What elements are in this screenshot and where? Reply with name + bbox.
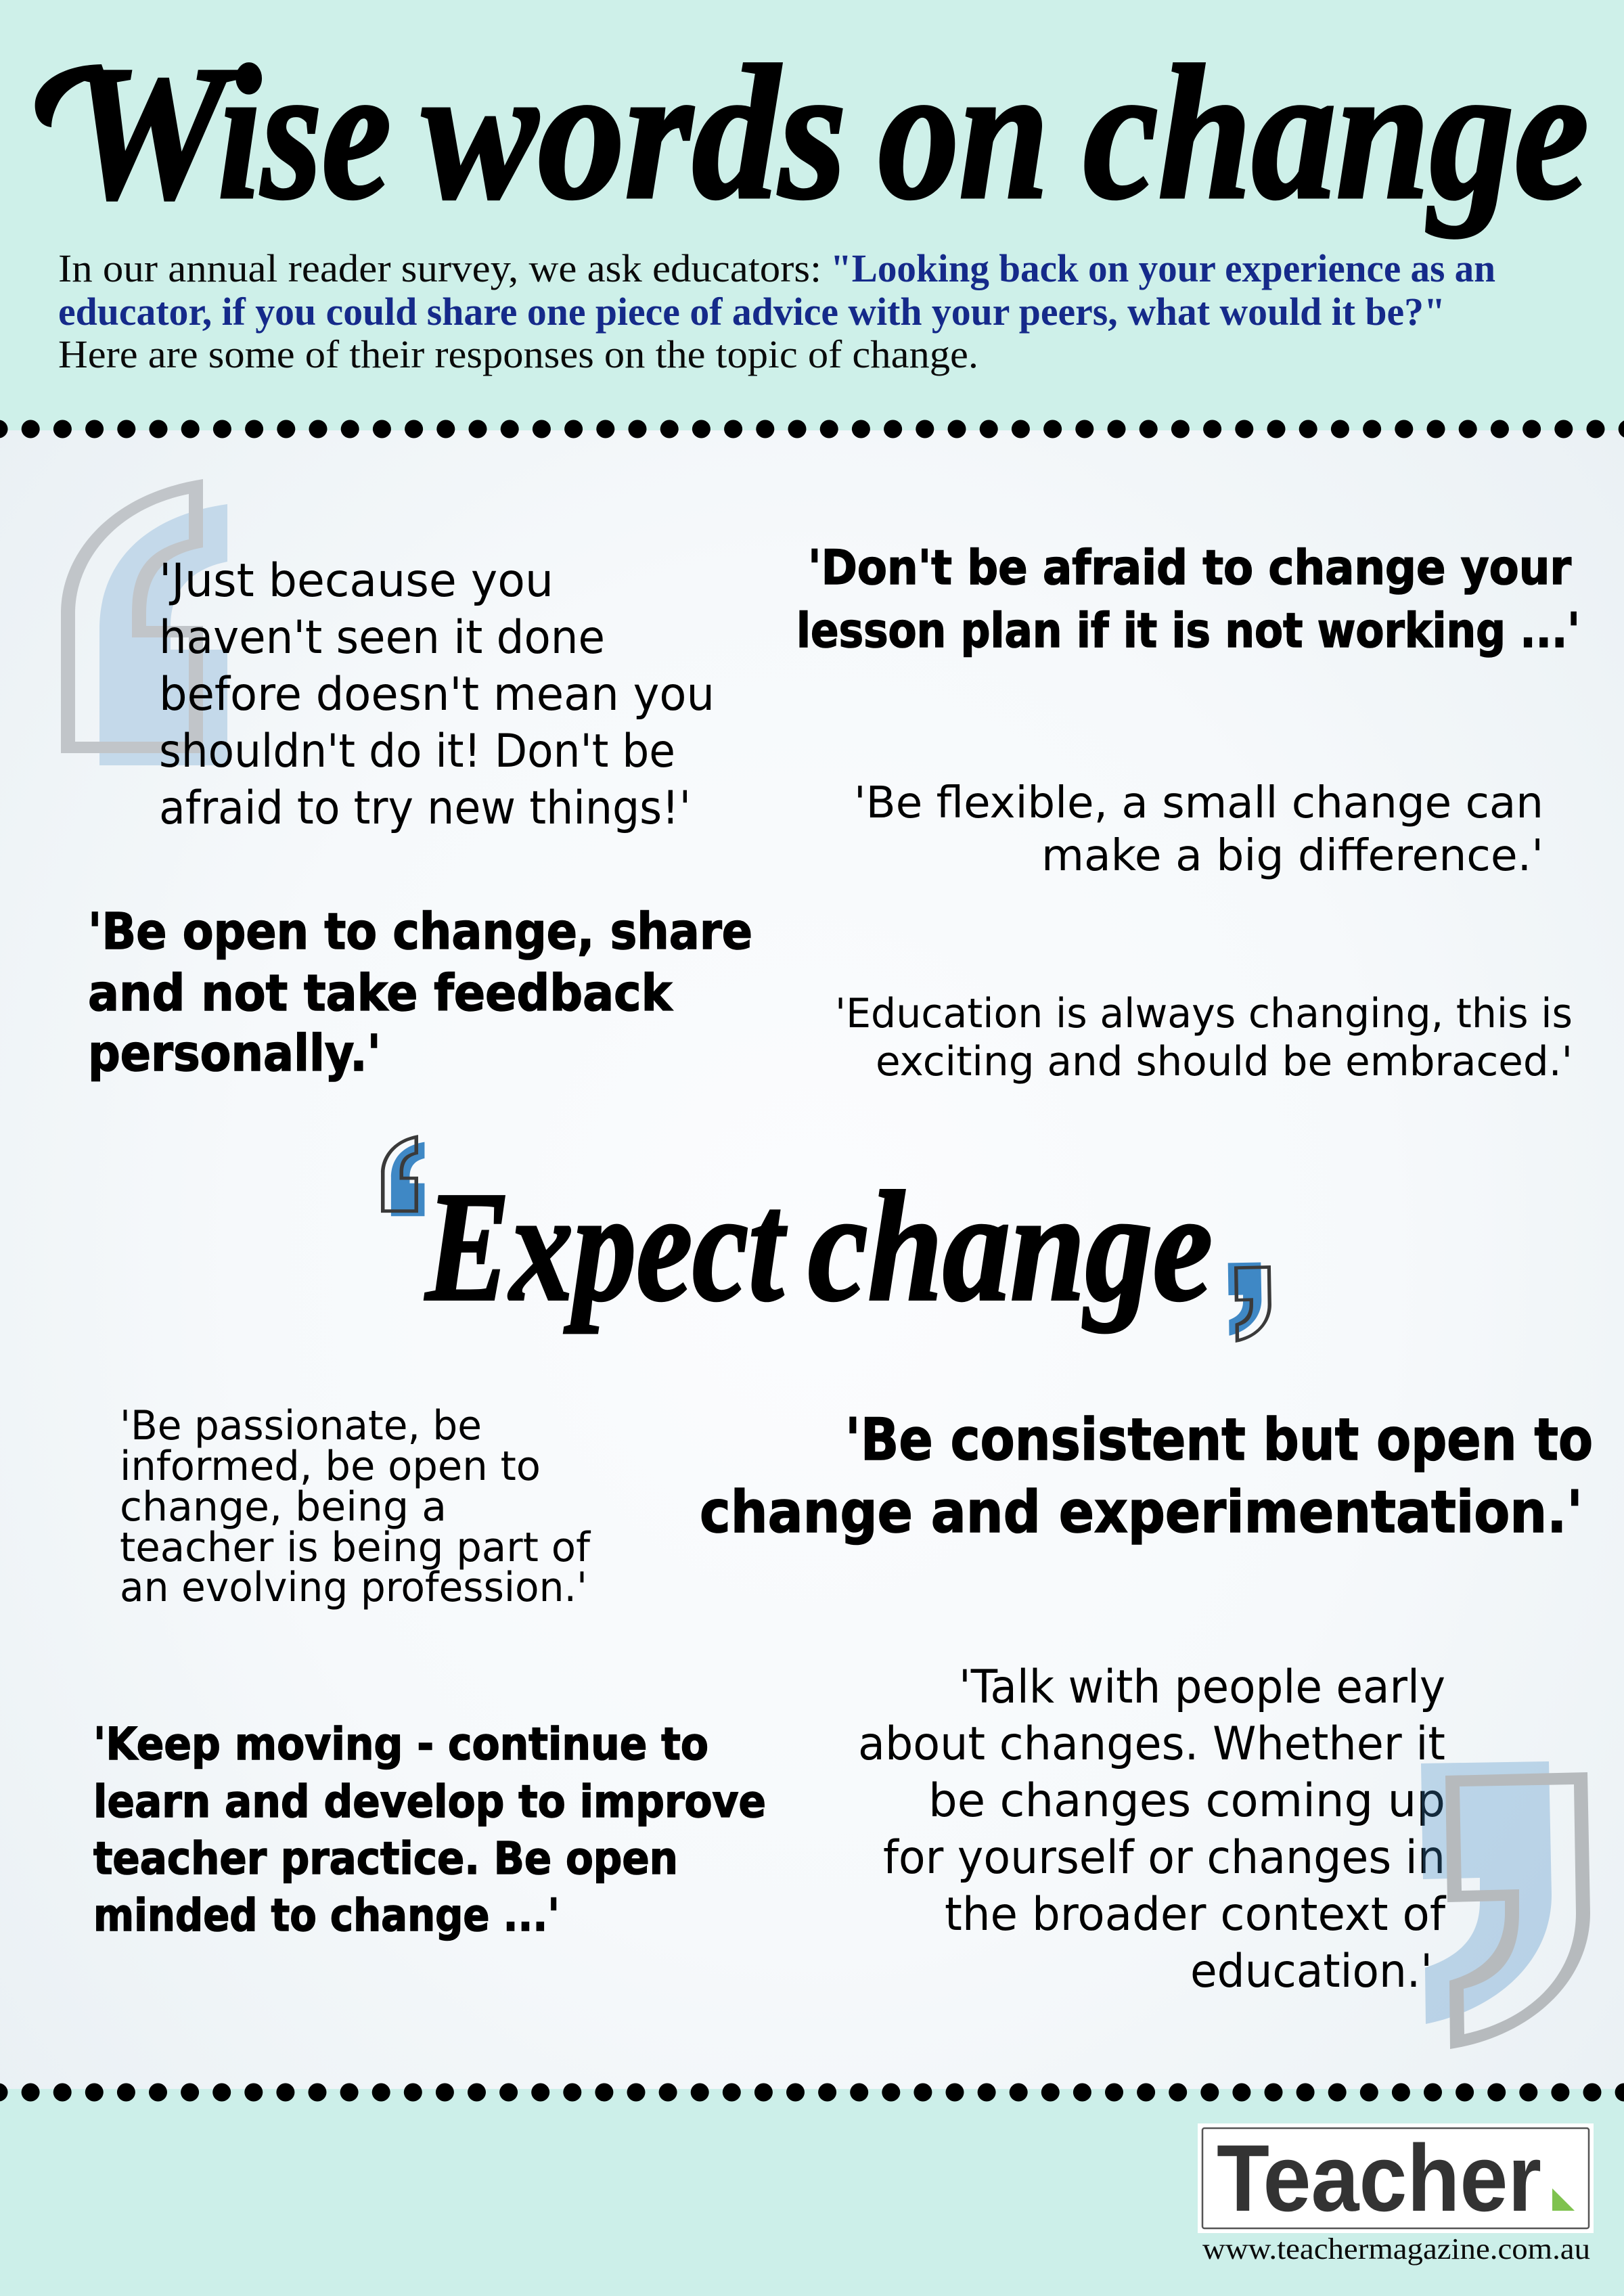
icon: large opening quote mark — [61, 479, 227, 765]
quote: be passionate: 'Be passionate, be — [120, 1402, 482, 1449]
quote: just because you haven't seen it done: 'Just because you — [159, 554, 554, 608]
title — [35, 27, 1589, 239]
bottom teal band — [0, 2089, 1624, 2296]
quote: be passionate: teacher is being part of — [120, 1524, 591, 1571]
heading: expect change: change — [808, 1160, 1213, 1334]
quote: keep moving — [93, 1718, 766, 1941]
quote: be passionate: an evolving profession.' — [120, 1564, 587, 1611]
intro text: In our annual reader survey, we ask educators: — [58, 246, 821, 290]
quote: talk with people early: be changes coming up — [928, 1774, 1445, 1828]
intro text: educator, if you could share one piece of advice with your peers, what would it be?" — [58, 290, 1445, 334]
icon: small closing quote mark — [1228, 1263, 1271, 1343]
quote: talk with people early: for yourself or changes in — [883, 1831, 1445, 1885]
quote: don't be afraid to change your lesson plan: 'Don't be afraid to change your — [808, 540, 1571, 595]
quote: keep moving: 'Keep moving - continue to — [93, 1718, 708, 1770]
quote: just because you haven't seen it done — [159, 554, 715, 835]
quote: just because you haven't seen it done: shouldn't do it! Don't be — [159, 725, 675, 778]
quote: keep moving: teacher practice. Be open — [93, 1832, 678, 1885]
quote: talk with people early: the broader context of — [945, 1888, 1447, 1941]
quote: talk with people early: about changes. Whether it — [858, 1717, 1445, 1771]
quote: be flexible — [854, 778, 1543, 881]
icon: small opening quote mark — [381, 1135, 424, 1216]
quote: education is always changing: exciting and should be embraced.' — [876, 1038, 1573, 1085]
quote: just because you haven't seen it done: haven't seen it done — [159, 611, 605, 665]
quote: be open to change: 'Be open to change, share — [88, 903, 752, 961]
quote: be open to change — [88, 903, 752, 1083]
title: ise — [218, 27, 391, 239]
quote: don't be afraid to change your lesson plan — [796, 540, 1580, 658]
quote: just because you haven't seen it done: before doesn't mean you — [159, 668, 715, 721]
quote: be passionate — [120, 1402, 591, 1611]
intro text: "Looking back on your experience as an — [830, 246, 1495, 290]
title: W — [68, 27, 238, 239]
title: words — [422, 27, 847, 239]
quote: talk with people early — [858, 1661, 1447, 1998]
quote: be passionate: informed, be open to — [120, 1443, 541, 1490]
quote: be open to change: personally.' — [88, 1025, 381, 1083]
central quotes panel background — [0, 430, 1624, 2089]
quote: be flexible: 'Be flexible, a small change can — [854, 778, 1543, 828]
quote: just because you haven't seen it done: afraid to try new things!' — [159, 782, 691, 835]
Teacher logo: Teacher — [1217, 2125, 1541, 2231]
title: on — [878, 27, 1049, 239]
heading: expect change — [424, 1160, 1213, 1334]
quote: talk with people early: 'Talk with people early — [959, 1661, 1445, 1714]
quote: talk with people early: education.' — [1190, 1945, 1433, 1998]
intro text — [58, 246, 1495, 376]
top teal band — [0, 0, 1624, 430]
quote: be passionate: change, being a — [120, 1483, 447, 1531]
quote: keep moving: learn and develop to improve — [93, 1776, 766, 1828]
quote: be open to change: and not take feedback — [88, 964, 673, 1022]
quote: be flexible: make a big difference.' — [1041, 831, 1543, 881]
heading: expect change: Expect — [424, 1160, 787, 1334]
quote: education is always changing — [835, 990, 1573, 1085]
quote: keep moving: minded to change ...' — [93, 1889, 560, 1941]
quote: education is always changing: 'Education is always changing, this is — [835, 990, 1573, 1037]
intro text: Here are some of their responses on the topic of change. — [58, 332, 978, 376]
website url: www.teachermagazine.com.au — [1202, 2232, 1590, 2266]
quote: be consistent but open to change — [700, 1406, 1593, 1546]
icon: large closing quote mark — [1421, 1761, 1590, 2049]
